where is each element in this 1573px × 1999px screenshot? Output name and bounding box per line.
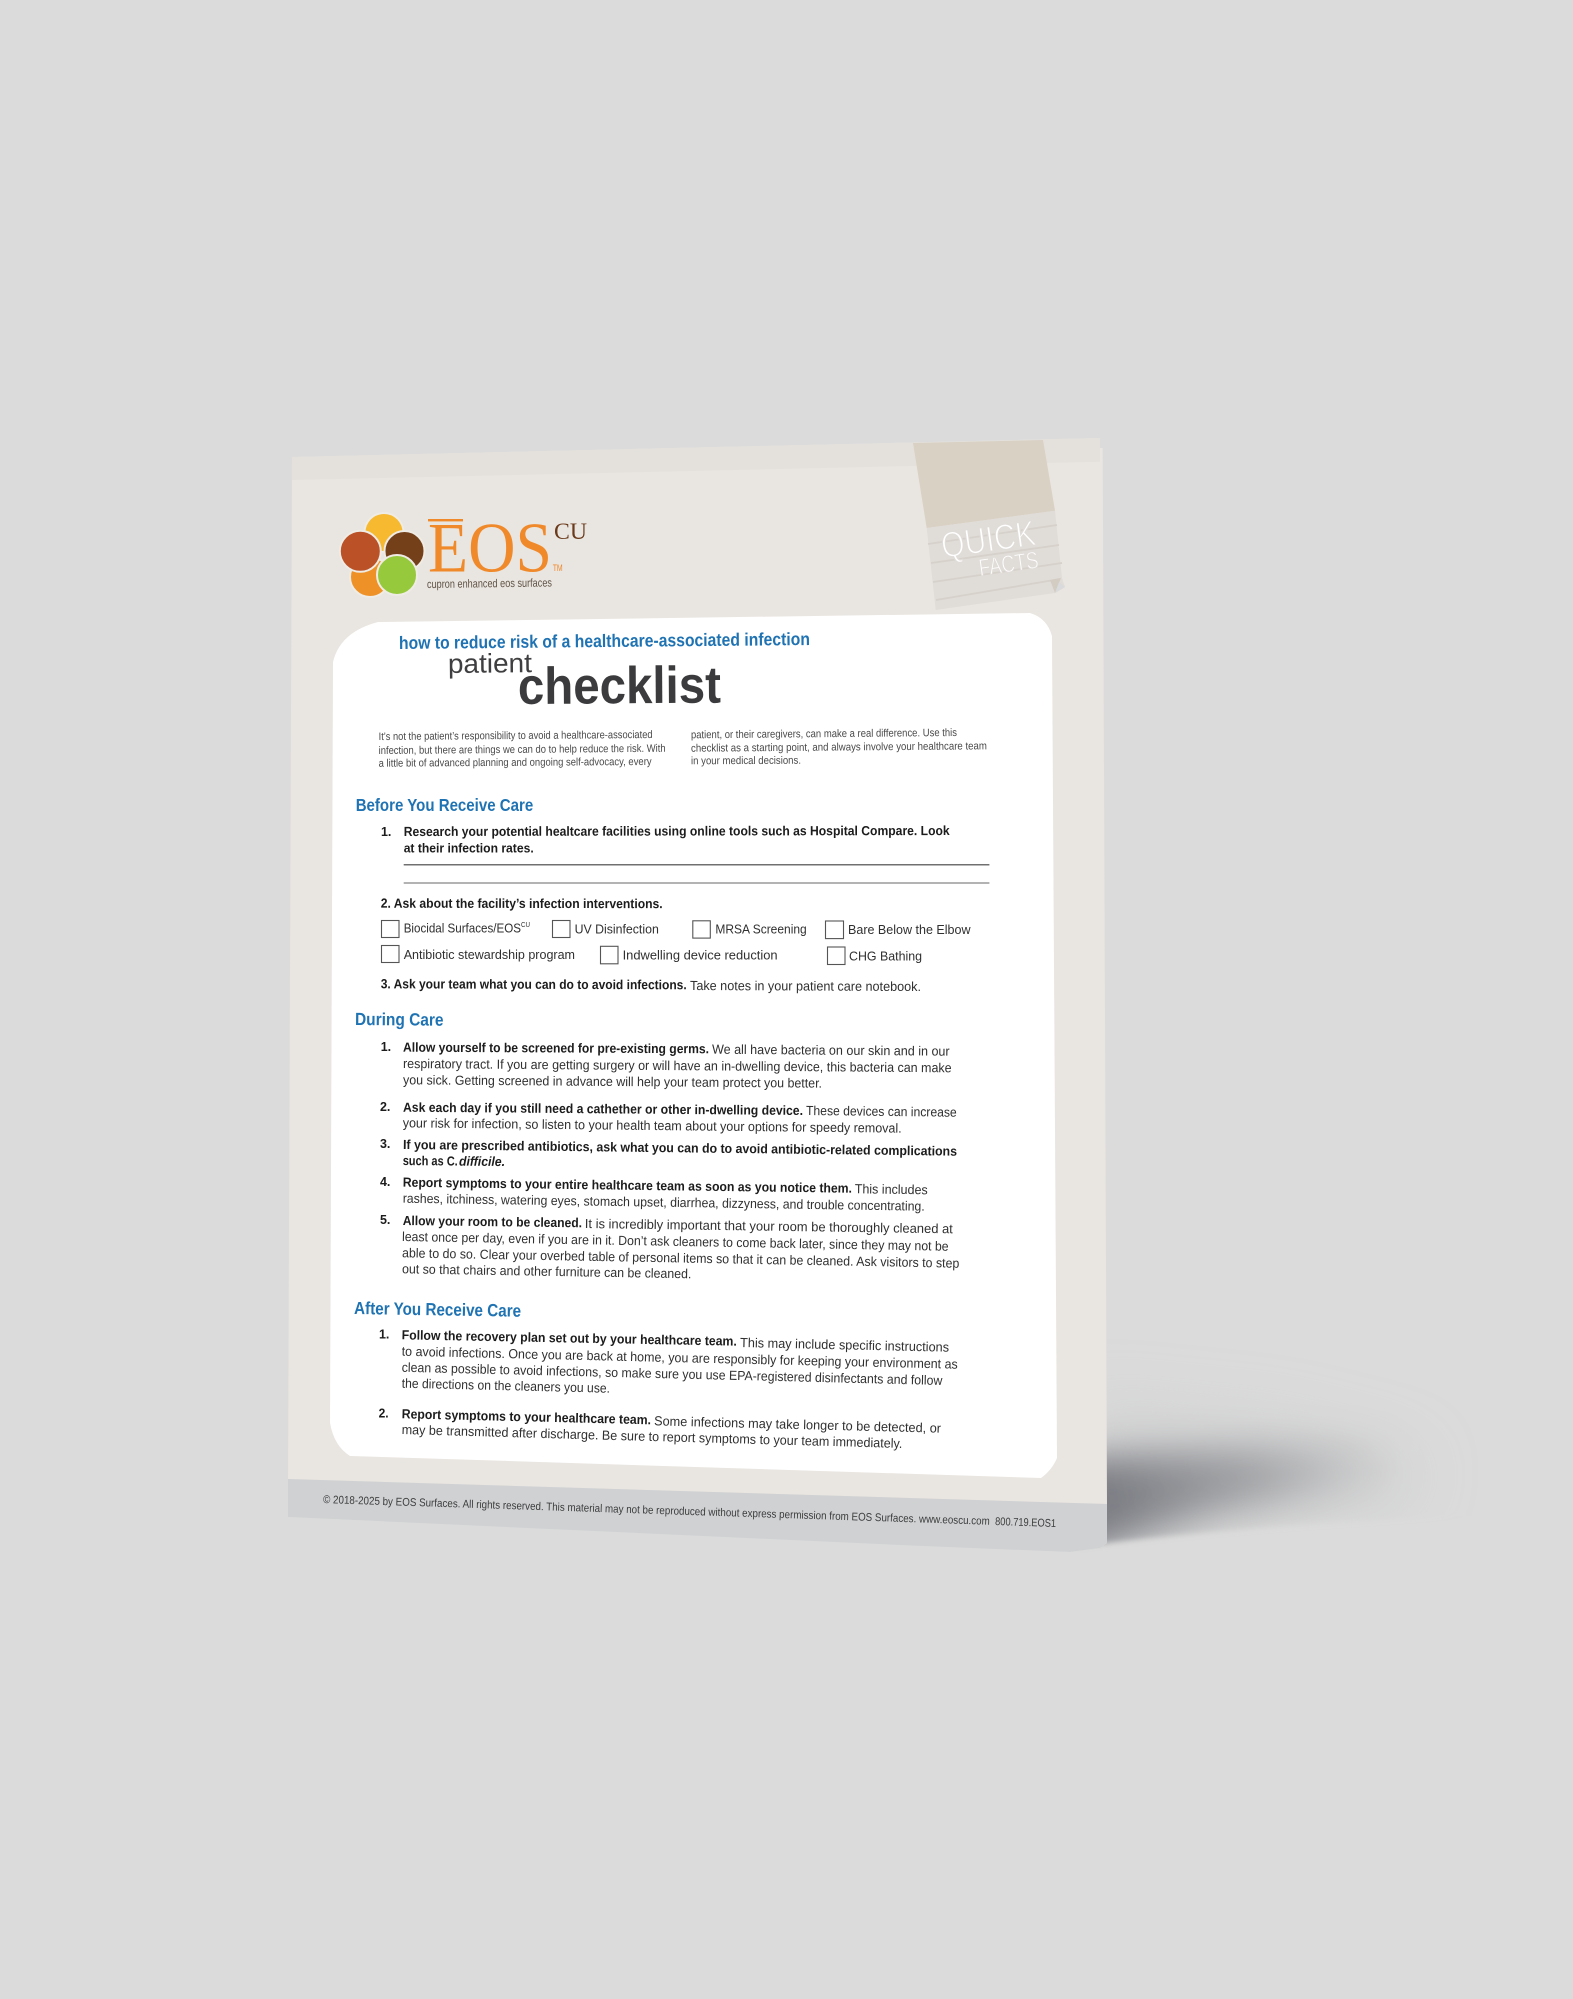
item 3 — [380, 1136, 957, 1169]
second write-in line — [404, 882, 989, 884]
item 1: 1. — [379, 1327, 389, 1342]
footer band — [288, 1479, 1107, 1552]
item 2 — [380, 1099, 957, 1136]
item 4: Report symptoms to your entire healthcare team as soon as you notice them. — [403, 1175, 852, 1196]
item 2: Report symptoms to your healthcare team. — [402, 1406, 651, 1427]
logo wordmark: EOS — [428, 510, 552, 588]
checkboxes: CU — [521, 922, 530, 929]
checkboxes: Biocidal Surfaces/EOS — [404, 921, 521, 936]
item 2: your risk for infection, so listen to your health team about your options for speedy removal. — [403, 1115, 902, 1136]
item 5 — [380, 1212, 959, 1281]
item 1 — [381, 1039, 952, 1091]
item 1: the directions on the cleaners you use. — [402, 1376, 610, 1396]
item 1 — [379, 1327, 958, 1396]
quick: QUICK — [938, 512, 1038, 566]
item 1: Follow the recovery plan set out by your healthcare team. — [402, 1327, 737, 1349]
item 2 — [379, 1406, 942, 1451]
logo circles — [340, 513, 424, 597]
facts: FACTS — [977, 547, 1040, 582]
heading: During Care — [355, 1009, 444, 1030]
white content panel — [330, 613, 1057, 1478]
heading: Before You Receive Care — [356, 795, 533, 815]
item 1: to avoid infections. Once you are back at home, you are responsibly for keeping your environment as — [402, 1344, 958, 1372]
footer text: © 2018-2025 by EOS Surfaces. All rights reserved. This material may not be reproduced without express permission from EOS Surfaces. www.eoscu.com — [323, 1494, 990, 1528]
logo: TM — [553, 563, 563, 573]
item 3: 3. — [380, 1136, 390, 1151]
item 1 — [381, 823, 950, 856]
intro paragraph: infection, but there are things we can do to help reduce the risk. With — [379, 743, 666, 757]
item 1: respiratory tract. If you are getting surgery or will have an in-dwelling device, this bacteria can make — [403, 1056, 952, 1075]
item 3 — [381, 976, 921, 994]
logo — [340, 510, 587, 597]
intro paragraph: checklist as a starting point, and always involve your healthcare team — [691, 740, 987, 755]
item 5: able to do so. Clear your overbed table of personal items so that it can be cleaned. Ask visitors to step — [402, 1245, 959, 1271]
checkboxes: UV Disinfection — [575, 921, 659, 936]
heading: After You Receive Care — [354, 1298, 521, 1321]
item 3: difficile. — [459, 1154, 505, 1169]
item 3: 3. Ask your team what you can do to avoid infections. — [381, 976, 687, 992]
item 4: rashes, itchiness, watering eyes, stomach upset, diarrhea, dizzyness, and trouble concentrating. — [403, 1191, 925, 1214]
item 3: If you are prescribed antibiotics, ask what you can do to avoid antibiotic-related complications — [403, 1137, 957, 1159]
checkboxes — [382, 920, 971, 964]
item 1: This may include specific instructions — [740, 1335, 950, 1355]
checkboxes: Indwelling device reduction — [623, 948, 778, 963]
item 2: may be transmitted after discharge. Be sure to report symptoms to your team immediately. — [402, 1422, 903, 1451]
intro paragraph: It’s not the patient’s responsibility to avoid a healthcare-associated — [379, 729, 653, 743]
item 1: 1. — [381, 824, 391, 839]
checkboxes: MRSA Screening — [715, 922, 807, 937]
item 3: such as C. — [403, 1153, 458, 1169]
write-in lines — [404, 864, 989, 866]
item 1: you sick. Getting screened in advance will help your team protect you better. — [403, 1072, 822, 1091]
checkboxes: Bare Below the Elbow — [848, 922, 971, 937]
intro paragraph — [379, 727, 987, 770]
section: during care — [355, 1009, 959, 1281]
intro paragraph: a little bit of advanced planning and ongoing self-advocacy, every — [379, 756, 652, 770]
top band — [292, 438, 1100, 480]
logo: CU — [554, 519, 587, 544]
item 3: Take notes in your patient care notebook. — [690, 978, 921, 994]
item 2: Ask each day if you still need a cathether or other in-dwelling device. — [403, 1100, 803, 1118]
subtitle: how to reduce risk of a healthcare-associated infection — [399, 629, 810, 653]
item 5: Allow your room to be cleaned. — [403, 1213, 582, 1230]
section: after you receive care — [354, 1298, 958, 1451]
item 1: 1. — [381, 1039, 391, 1054]
logo tagline: cupron enhanced eos surfaces — [427, 577, 552, 591]
item 5: It is incredibly important that your room be thoroughly cleaned at — [585, 1216, 953, 1236]
checkboxes: CHG Bathing — [849, 948, 922, 963]
title patient: patient — [448, 648, 533, 679]
item 1: Research your potential healtcare facilities using online tools such as Hospital Compare. Look — [404, 823, 950, 839]
item 4: 4. — [380, 1174, 390, 1189]
item 2: 2. — [379, 1406, 389, 1421]
item 2: Some infections may take longer to be detected, or — [654, 1413, 942, 1436]
item 2: 2. — [380, 1099, 390, 1114]
item 5: out so that chairs and other furniture can be cleaned. — [402, 1261, 692, 1281]
item 2: These devices can increase — [806, 1103, 957, 1120]
item 4: This includes — [855, 1181, 928, 1197]
section: before you receive care — [356, 795, 989, 994]
item 2: 2. Ask about the facility’s infection interventions. — [381, 896, 663, 911]
quick facts tab — [913, 440, 1065, 610]
title checklist: checklist — [518, 657, 721, 716]
item 4 — [380, 1174, 928, 1214]
item 1: We all have bacteria on our skin and in our — [712, 1042, 950, 1059]
item 5: 5. — [380, 1212, 390, 1227]
header text — [399, 629, 810, 716]
item 1: Allow yourself to be screened for pre-existing germs. — [403, 1040, 709, 1056]
item 1: clean as possible to avoid infections, so make sure you use EPA-registered disinfectants and follow — [402, 1360, 943, 1388]
item 1: at their infection rates. — [404, 841, 534, 856]
intro paragraph: patient, or their caregivers, can make a real difference. Use this — [691, 727, 958, 741]
paper sheet — [288, 438, 1107, 1552]
cast shadow — [1103, 1418, 1390, 1546]
checkboxes: Antibiotic stewardship program — [404, 947, 575, 962]
item 5: least once per day, even if you are in it. Don’t ask cleaners to come back later, since they may not be — [402, 1229, 949, 1254]
intro paragraph: in your medical decisions. — [691, 755, 801, 767]
footer text: 800.719.EOS1 — [995, 1516, 1056, 1530]
